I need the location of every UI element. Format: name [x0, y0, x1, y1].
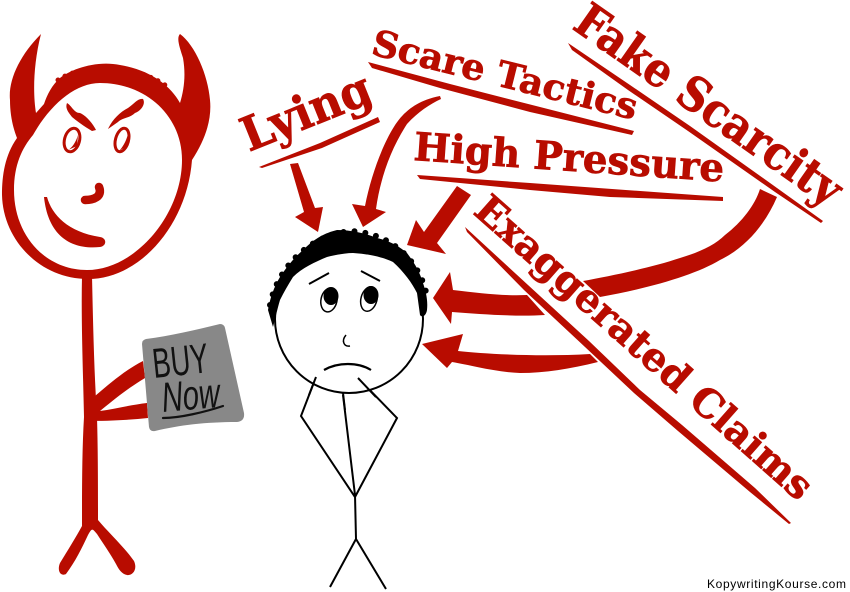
arrow: into head from the right — [433, 272, 545, 324]
devil eyes — [62, 126, 131, 154]
sign text: now: Now — [160, 369, 223, 421]
devil nose — [85, 187, 100, 200]
sign underline — [163, 406, 223, 418]
devil brows — [66, 99, 144, 131]
arrow: fake scarcity curve — [583, 189, 777, 297]
sign text: buy: BUY — [150, 334, 211, 387]
devil hair texture — [58, 68, 165, 85]
footer: site credit: KopywritingKourse.com — [707, 577, 846, 591]
man brows — [309, 271, 380, 284]
devil smile — [44, 197, 105, 247]
arrow: lying to head — [290, 163, 323, 232]
devil figure — [2, 34, 210, 575]
man hair — [268, 230, 427, 327]
label: high pressure: High Pressure — [412, 124, 726, 192]
arrow: high pressure to head — [407, 186, 471, 254]
devil body and legs — [59, 276, 135, 575]
arrow: lower into head — [422, 334, 598, 373]
man mouth — [324, 364, 371, 370]
arrow: scare tactics to head — [352, 96, 441, 227]
man body — [301, 377, 397, 589]
label: lying: Lying — [233, 61, 380, 163]
man nose — [343, 335, 350, 346]
worried man figure — [268, 230, 427, 589]
devil head with horns — [2, 34, 210, 279]
man eyes — [319, 285, 380, 313]
label: scare tactics: Scare Tactics — [368, 22, 642, 129]
label: exaggerated claims: Exaggerated Claims — [465, 186, 822, 509]
buy now sign — [142, 324, 244, 431]
man head — [275, 245, 423, 393]
devil arms — [84, 361, 148, 421]
